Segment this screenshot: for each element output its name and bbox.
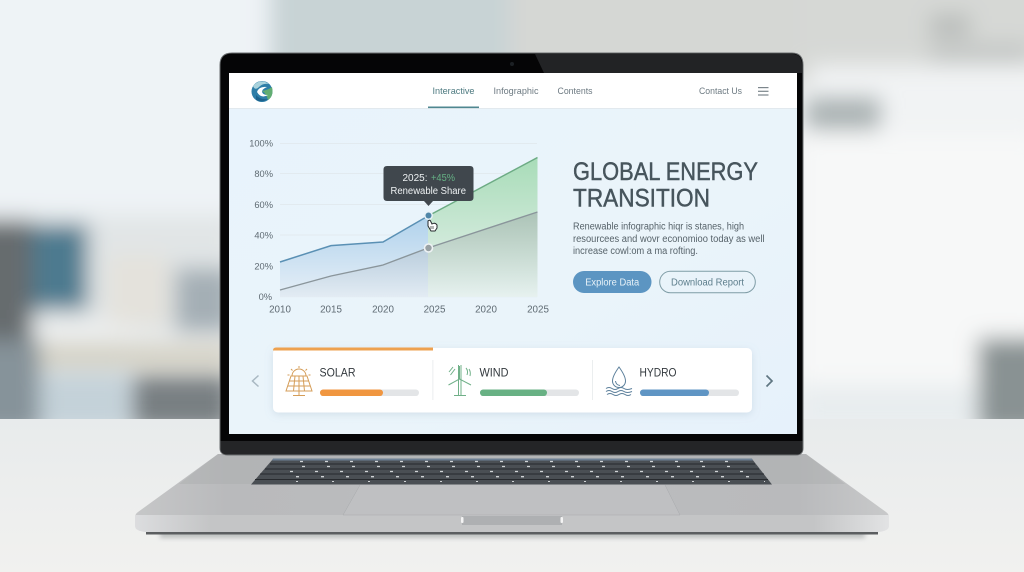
laptop front edge xyxy=(135,515,889,533)
arrow: previous xyxy=(252,376,258,386)
description text: Renewable infographic hiqr is stanes, high xyxy=(573,222,744,232)
description text: resourcees and wovr economioo today as well xyxy=(573,234,764,245)
x axis labels: 2025 xyxy=(424,304,446,316)
navigation bar xyxy=(229,73,797,109)
description text xyxy=(573,222,764,257)
button: Explore Data: Explore Data xyxy=(585,278,640,288)
front notch xyxy=(461,516,563,525)
card: hydro xyxy=(606,367,739,396)
button: Download Report xyxy=(660,271,755,293)
icon: logo swirl xyxy=(252,81,272,102)
x axis labels: 2015 xyxy=(320,304,342,316)
y axis labels: 100% xyxy=(249,138,273,148)
laptop shadow xyxy=(160,531,865,538)
panel: energy cards xyxy=(273,348,752,412)
title: TRANSITION xyxy=(573,184,710,212)
tooltip: 2025: xyxy=(402,173,428,184)
x axis labels: 2025 xyxy=(527,304,549,316)
laptop base deck xyxy=(135,454,889,518)
tooltip xyxy=(384,166,474,206)
title xyxy=(573,158,758,212)
label: SOLAR: SOLAR xyxy=(320,368,356,380)
y axis labels xyxy=(249,138,273,302)
active tab bar xyxy=(273,348,433,350)
button: Download Report: Download Report xyxy=(671,278,744,288)
icon: water drop xyxy=(606,367,632,396)
description text: increase cowl:om a ma rofting. xyxy=(573,246,698,257)
icon: wind turbine xyxy=(448,365,471,396)
marker: gray point xyxy=(424,243,433,253)
label: HYDRO: HYDRO xyxy=(640,368,677,380)
nav: Interactive (active) xyxy=(428,86,479,108)
progress bar: solar xyxy=(320,390,419,396)
progress bar: wind xyxy=(480,390,579,396)
area: gray series xyxy=(280,212,538,297)
icon: solar panel xyxy=(286,366,312,396)
laptop lid and bezel xyxy=(220,53,803,455)
table surface xyxy=(0,419,1024,572)
camera xyxy=(510,62,514,66)
line: green series xyxy=(428,158,538,216)
y axis labels: 40% xyxy=(254,230,273,240)
y axis labels: 20% xyxy=(254,262,273,272)
nav: Infographic: Infographic xyxy=(494,86,539,96)
x axis labels: 2020 xyxy=(372,304,394,316)
tooltip: Renewable Share xyxy=(390,186,466,197)
x axis labels: 2020 xyxy=(475,304,497,316)
area: blue series xyxy=(280,216,428,297)
tooltip: +45% xyxy=(431,173,455,184)
icon: hand cursor xyxy=(428,220,437,231)
line: blue series xyxy=(280,216,428,262)
laptop xyxy=(135,53,889,538)
icon: hamburger menu xyxy=(758,87,768,96)
nav: Contents: Contents xyxy=(558,86,593,96)
nav: Contact Us: Contact Us xyxy=(699,86,742,96)
card: wind xyxy=(448,365,579,396)
arrow: next xyxy=(766,376,772,386)
line: gray series xyxy=(280,212,538,290)
x axis labels xyxy=(269,304,549,316)
y axis labels: 0% xyxy=(259,292,272,302)
trackpad xyxy=(343,485,680,515)
area chart xyxy=(249,138,549,316)
y axis labels: 60% xyxy=(254,200,273,210)
label: WIND: WIND xyxy=(480,368,508,380)
y axis labels: 80% xyxy=(254,169,273,179)
progress bar: hydro xyxy=(640,390,739,396)
area: green series xyxy=(428,158,538,297)
title: GLOBAL ENERGY xyxy=(573,158,758,186)
button: Explore Data xyxy=(573,271,652,293)
screen xyxy=(229,73,797,434)
x axis labels: 2010 xyxy=(269,304,291,316)
card: solar xyxy=(286,366,419,396)
nav: Interactive (active): Interactive xyxy=(432,86,474,96)
keyboard xyxy=(251,458,772,484)
marker: blue point xyxy=(424,211,433,220)
blurred office background xyxy=(0,0,1024,435)
